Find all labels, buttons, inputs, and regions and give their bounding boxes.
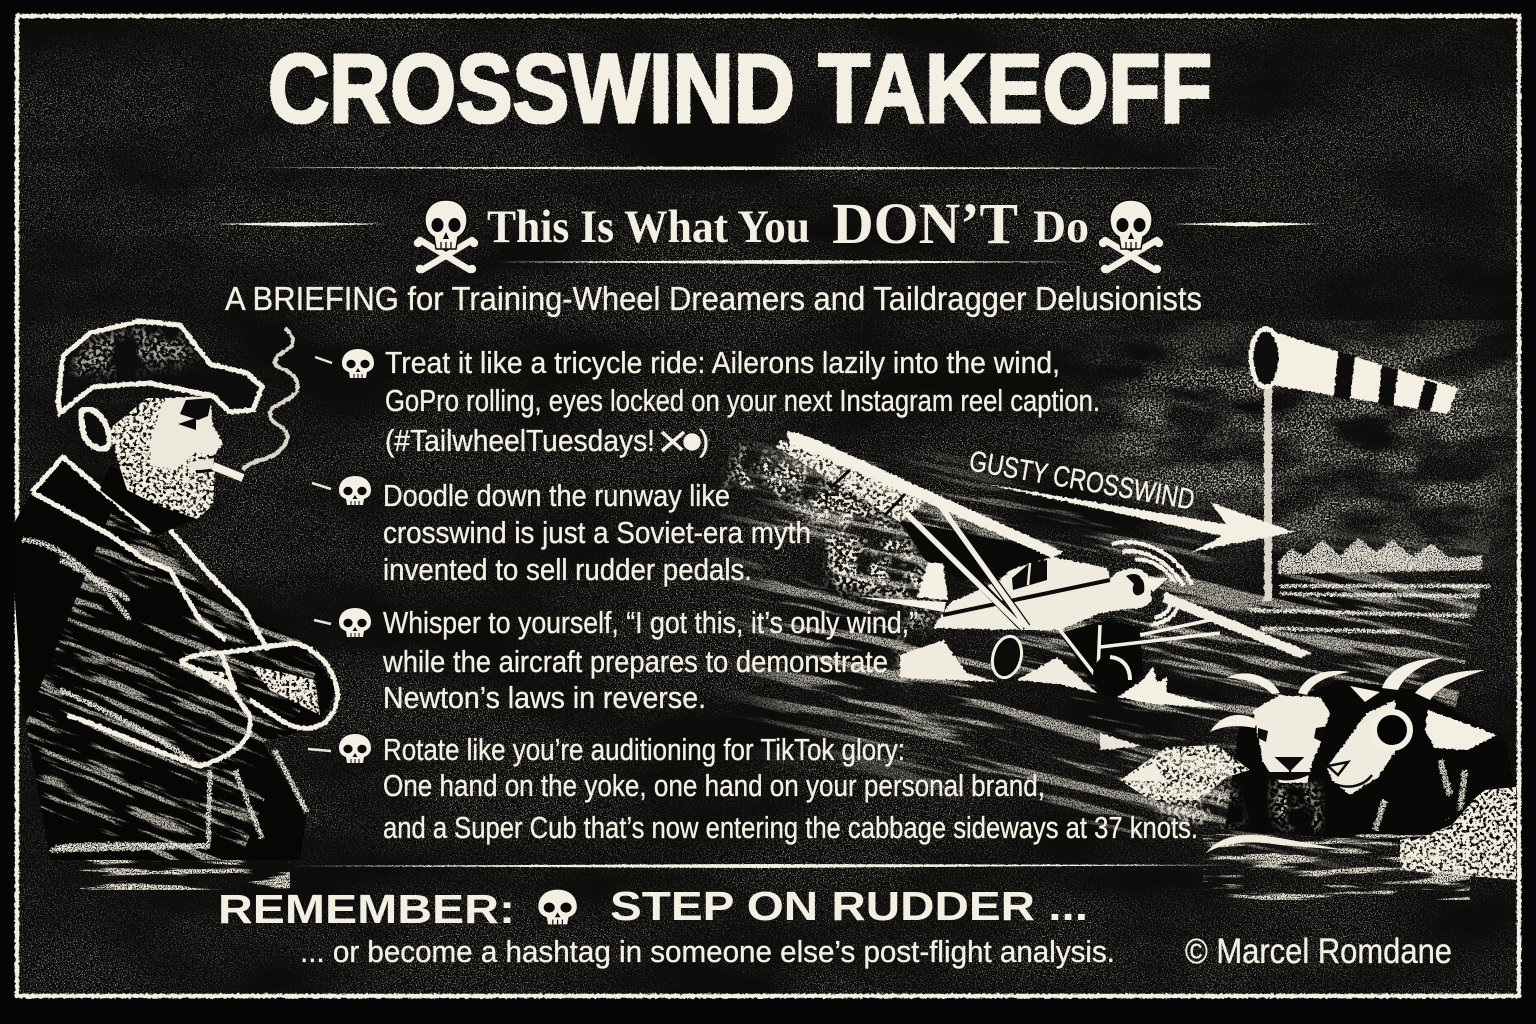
line 2: One hand on the yoke, one hand on your personal brand, bbox=[383, 768, 1045, 803]
middle goat beard bbox=[1272, 785, 1320, 830]
subtitle end: Do bbox=[1033, 201, 1089, 253]
left sheep body bbox=[1145, 785, 1240, 825]
bullet 2 bbox=[312, 476, 811, 587]
right goat ear bbox=[1425, 710, 1497, 750]
bullet 1 bbox=[315, 345, 1100, 458]
right goat horns bbox=[1382, 658, 1485, 700]
illustration: dust cloud behind plane bbox=[725, 445, 1097, 693]
icon: skull bbox=[538, 890, 577, 924]
sock stripes bbox=[1334, 351, 1438, 411]
engine shadow bbox=[1060, 620, 1143, 697]
window post bbox=[1028, 563, 1030, 585]
main wing panel bbox=[776, 440, 925, 522]
jacket folds bbox=[22, 540, 210, 848]
left rule bbox=[215, 222, 388, 226]
wing struts bbox=[937, 540, 1027, 628]
icon: skull bbox=[339, 734, 371, 763]
line 3: and a Super Cub that’s now entering the cabbage sideways at 37 knots. bbox=[383, 810, 1198, 845]
icon: skull bbox=[339, 476, 371, 505]
runway streak near goats bbox=[1100, 733, 1142, 750]
cabin windows bbox=[1012, 560, 1047, 590]
sleeve shading bbox=[190, 665, 320, 715]
sheep back highlight bbox=[1206, 835, 1345, 853]
right wheel bbox=[1093, 653, 1137, 697]
line 1: Treat it like a tricycle ride: Ailerons lazily into the wind, bbox=[385, 345, 1060, 380]
wing ribs bbox=[830, 470, 905, 515]
illustration: airplane bbox=[776, 431, 1312, 708]
jacket body bbox=[10, 457, 337, 860]
middle goat ear bbox=[1210, 715, 1257, 732]
cowl shadow bbox=[1126, 574, 1144, 595]
icon: skull bbox=[339, 608, 371, 637]
wing underside shadow bbox=[899, 520, 1060, 580]
line 1: Doodle down the runway like bbox=[383, 478, 730, 513]
right goat nose and mouth bbox=[1328, 762, 1372, 787]
bullet tick bbox=[315, 357, 332, 363]
icon: right skull and crossbones bbox=[1099, 200, 1163, 273]
line 1: Rotate like you’re auditioning for TikTok glory: bbox=[383, 732, 905, 767]
divider under title bbox=[243, 166, 1238, 170]
moustache bbox=[190, 458, 214, 470]
line 2: GoPro rolling, eyes locked on your next Instagram reel caption. bbox=[385, 383, 1100, 418]
hillside wind streaks bbox=[712, 431, 1492, 887]
line 2: crosswind is just a Soviet-era myth bbox=[383, 515, 811, 550]
divider above footer bbox=[290, 864, 1235, 868]
right goat fleece bbox=[1400, 787, 1516, 880]
bullet tick bbox=[308, 749, 331, 751]
arrow: gusty crosswind bbox=[980, 483, 1294, 552]
arrow label: GUSTY CROSSWIND bbox=[967, 445, 1197, 516]
illustration: windsock bbox=[1251, 329, 1458, 601]
bullet 4 bbox=[308, 732, 1198, 845]
footer callout bbox=[218, 883, 1088, 932]
illustration: pilot bbox=[14, 318, 341, 860]
bullet tick bbox=[314, 620, 331, 624]
wheel dust right bbox=[1017, 657, 1097, 693]
bullet 3 bbox=[314, 605, 918, 715]
wheel splash bbox=[1117, 667, 1222, 708]
jacket texture bbox=[26, 513, 317, 860]
wheel dust left bbox=[900, 640, 997, 682]
wing strut lines bbox=[906, 497, 1027, 628]
collar bbox=[1410, 785, 1482, 838]
smoke bbox=[243, 328, 298, 470]
trouser folds bbox=[50, 750, 307, 850]
illustration: distant trees bbox=[1278, 538, 1482, 574]
middle goat horns bbox=[1227, 671, 1350, 695]
remember label: REMEMBER: bbox=[218, 886, 515, 932]
icon: skull bbox=[342, 349, 374, 378]
subtitle banner bbox=[215, 191, 1322, 273]
sock mouth bbox=[1251, 329, 1281, 387]
goggles bbox=[1374, 712, 1410, 748]
fuselage stripe bbox=[943, 580, 1110, 615]
footer note: ... or become a hashtag in someone else’s post-flight analysis. bbox=[300, 934, 1115, 969]
right rule bbox=[1172, 222, 1322, 226]
neck hair bbox=[1375, 760, 1465, 830]
emphasised word: DON’T bbox=[832, 191, 1018, 256]
lower struts bbox=[1060, 620, 1220, 675]
upper dust cloud bbox=[725, 445, 945, 690]
left wheel bbox=[988, 633, 1026, 681]
main wing leading edge bbox=[786, 431, 1064, 558]
eye shadow bbox=[180, 398, 212, 420]
face bbox=[150, 396, 223, 470]
line 3: invented to sell rudder pedals. bbox=[383, 552, 752, 587]
right goat head bbox=[1327, 700, 1395, 795]
briefing subtitle: A BRIEFING for Training-Wheel Dreamers and Taildragger Delusionists bbox=[225, 280, 1202, 317]
bullet tick bbox=[312, 483, 331, 489]
illustration: ground lines bbox=[1250, 586, 1490, 632]
illustration: goats and sheep bbox=[1100, 658, 1516, 900]
pole bbox=[1264, 385, 1272, 601]
closing bracket: ) bbox=[699, 423, 709, 458]
left sheep ear bbox=[1120, 762, 1165, 782]
cap texture bbox=[70, 327, 198, 382]
middle goat eyes bbox=[1258, 726, 1328, 742]
line 3: Newton’s laws in reverse. bbox=[383, 680, 706, 715]
right goat small ear bbox=[1350, 686, 1380, 702]
icon: left skull and crossbones bbox=[414, 200, 478, 273]
foreground sheep back bbox=[1203, 834, 1470, 900]
line 3: (#TailwheelTuesdays! bbox=[385, 423, 655, 458]
illustration: grass below pilot bbox=[80, 860, 290, 890]
signature: © Marcel Romdane bbox=[1185, 932, 1452, 971]
subtitle text: This Is What You bbox=[487, 201, 810, 253]
sky mottling behind windsock bbox=[1060, 320, 1516, 580]
collar and lapels bbox=[32, 457, 268, 650]
ear bbox=[80, 409, 110, 449]
underline bbox=[497, 260, 1081, 264]
eye bbox=[178, 418, 196, 430]
cigarette bbox=[213, 466, 243, 478]
spinner bbox=[1140, 577, 1168, 592]
fuselage bbox=[933, 557, 1140, 630]
propeller arcs bbox=[1112, 542, 1192, 625]
near wing bbox=[1162, 592, 1312, 658]
line 2: while the aircraft prepares to demonstrate bbox=[382, 644, 888, 679]
mouth bbox=[196, 470, 214, 472]
line 1: Whisper to yourself, “I got this, it’s only wind,” bbox=[383, 605, 918, 640]
title: CROSSWIND TAKEOFF bbox=[268, 34, 1212, 143]
middle goat nose and smile bbox=[1265, 758, 1312, 780]
tail fin bbox=[917, 563, 948, 600]
sock body bbox=[1274, 332, 1458, 414]
dark backing bbox=[1225, 680, 1516, 850]
middle goat head bbox=[1253, 695, 1330, 783]
crossed arms bbox=[67, 643, 338, 766]
icon: tools emoji bbox=[662, 432, 699, 451]
rudder message: STEP ON RUDDER ... bbox=[610, 883, 1088, 929]
wheel highlight bbox=[1110, 657, 1130, 680]
cap bbox=[58, 321, 262, 413]
engine cowl bbox=[1110, 568, 1152, 609]
left sheep head bbox=[1120, 745, 1250, 800]
head side and beard bbox=[108, 398, 215, 519]
tailplane bbox=[858, 597, 946, 612]
neck shadow bbox=[100, 465, 197, 535]
